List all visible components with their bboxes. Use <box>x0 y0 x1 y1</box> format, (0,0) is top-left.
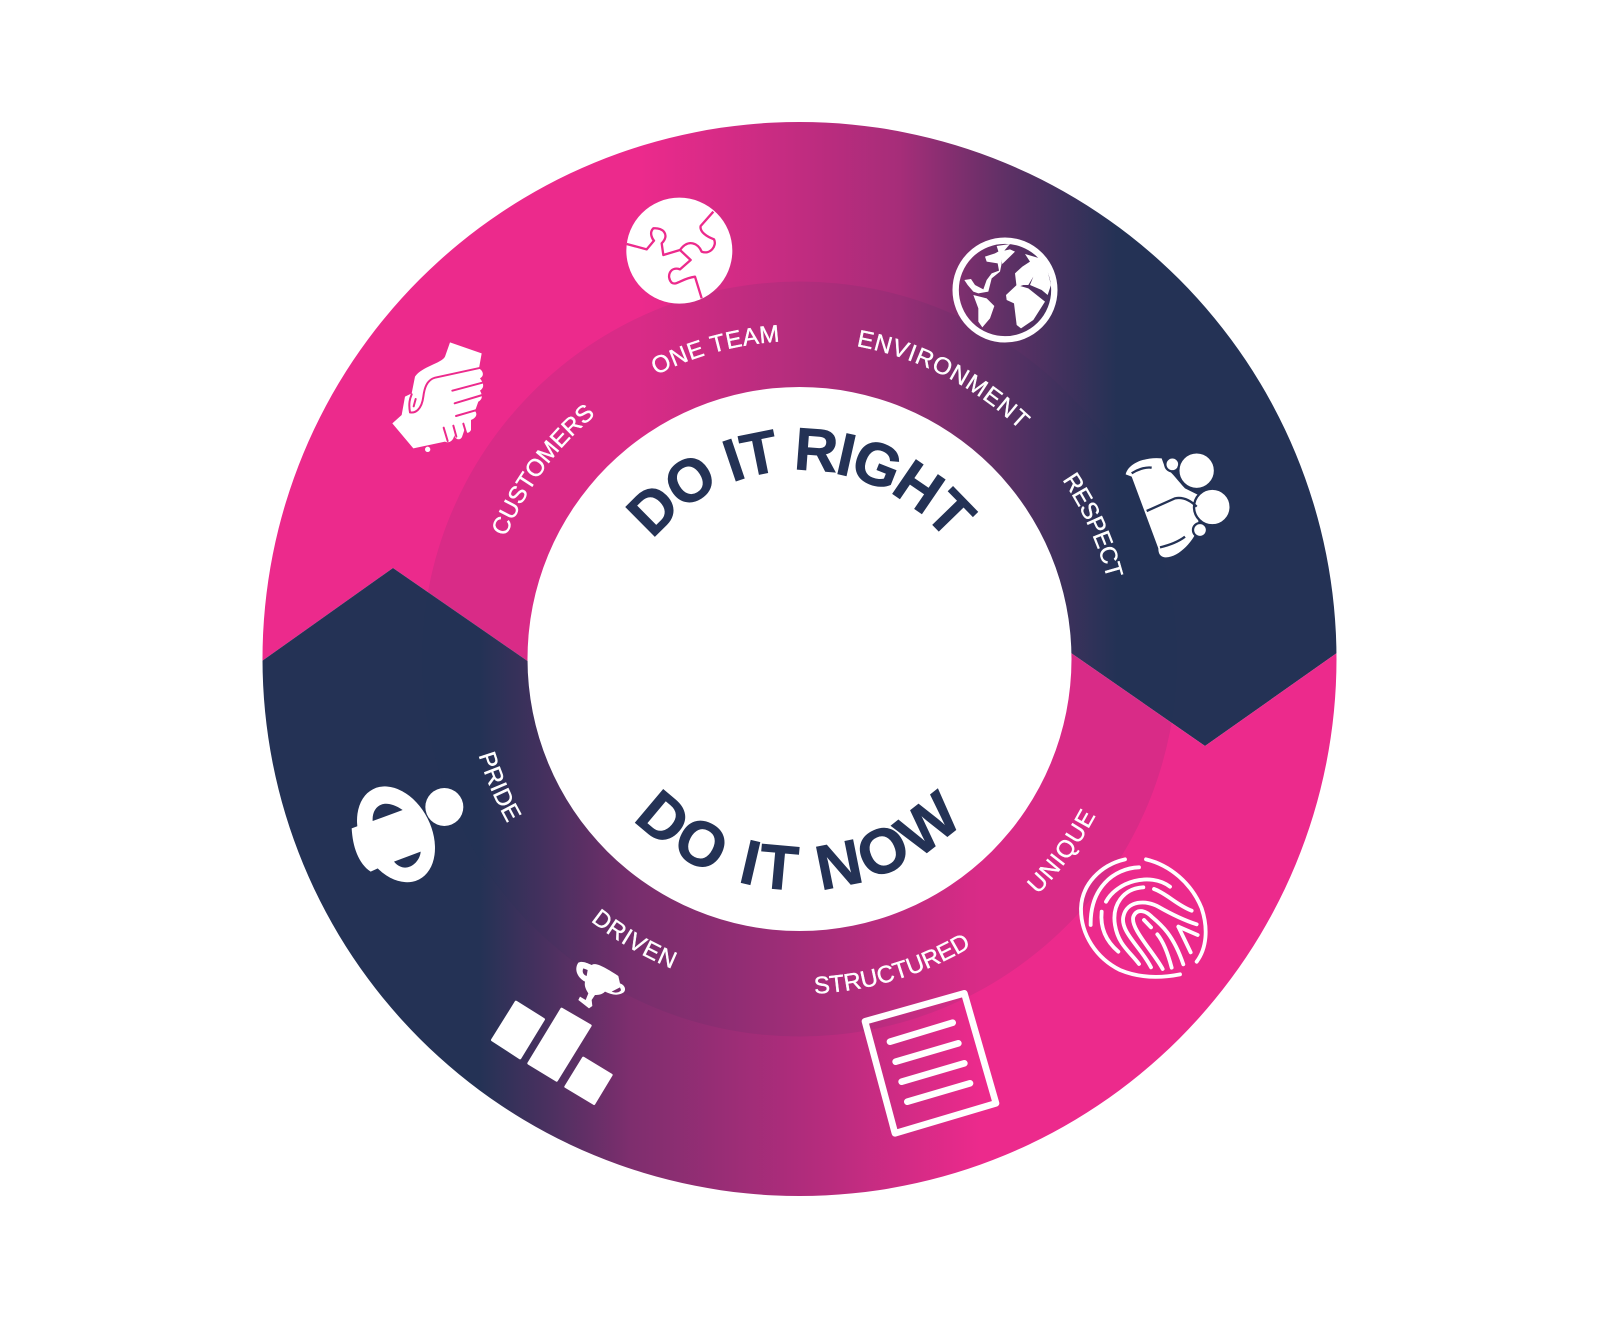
title: do it now: DO IT NOW <box>634 788 956 890</box>
label: structured: STRUCTURED <box>815 935 968 994</box>
icon: fingerprint <box>1081 859 1206 977</box>
icon: podium <box>492 1002 611 1104</box>
label: customers: CUSTOMERS <box>493 405 594 534</box>
donut wheel <box>262 122 1336 1196</box>
label: pride: PRIDE <box>478 752 522 823</box>
lower band: do it now <box>262 568 1336 1196</box>
label: unique: UNIQUE <box>1026 808 1096 892</box>
label: one team: ONE TEAM <box>652 325 778 372</box>
upper band: do it right <box>262 122 1336 746</box>
icon: document <box>865 993 996 1133</box>
icon: handshake <box>392 342 483 452</box>
label: respect: RESPECT <box>1063 472 1124 575</box>
icon: puzzle <box>626 198 732 304</box>
icon: pride person <box>342 773 463 896</box>
icon: respect people <box>1126 452 1231 557</box>
south america <box>973 295 994 327</box>
north america <box>964 251 1002 293</box>
greenland <box>997 244 1015 264</box>
title: do it right: DO IT RIGHT <box>625 428 978 537</box>
label: environment: ENVIRONMENT <box>858 330 1032 426</box>
icon: trophy <box>576 962 625 1008</box>
africa <box>1006 285 1045 328</box>
icon: globe <box>956 241 1054 339</box>
eurasia <box>1015 254 1051 295</box>
inner darker ring <box>422 282 1177 1036</box>
label: driven: DRIVEN <box>592 908 678 968</box>
